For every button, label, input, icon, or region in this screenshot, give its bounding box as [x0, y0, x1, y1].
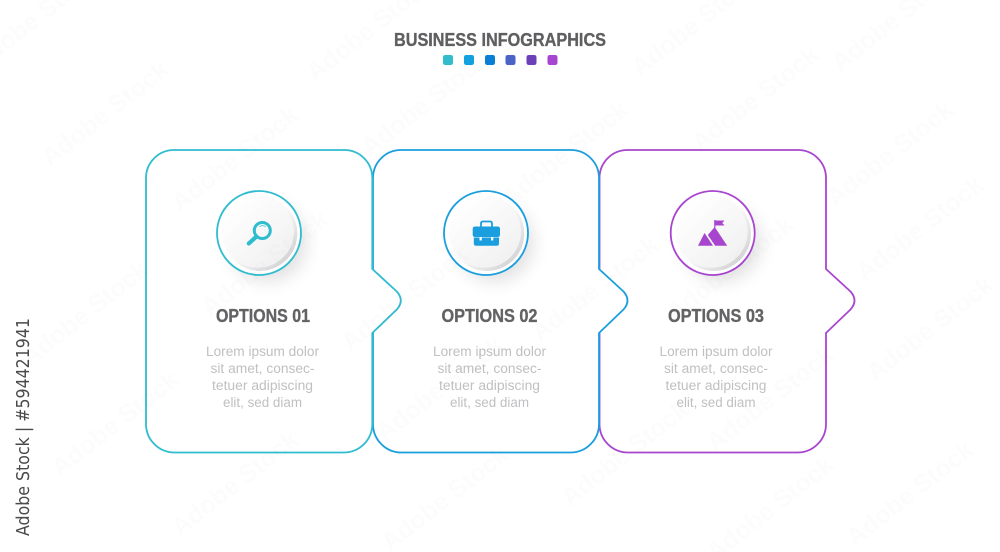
heading: options 03: OPTIONS 03	[668, 305, 764, 326]
panel: options 01	[146, 150, 401, 452]
heading: options 01: OPTIONS 01	[216, 305, 310, 326]
color dots row	[443, 55, 558, 65]
panel outline 03	[600, 150, 854, 452]
title: BUSINESS INFOGRAPHICS	[394, 29, 606, 50]
body text 02: tetuer adipiscing	[439, 378, 540, 393]
icon: mountain with flag	[698, 220, 727, 246]
body text 03: elit, sed diam	[676, 395, 756, 410]
icon: briefcase	[473, 222, 500, 246]
button 03	[671, 191, 760, 281]
body text 03: Lorem ipsum dolor	[660, 344, 773, 359]
panel outline 01	[146, 150, 401, 452]
watermark: stock id: Adobe Stock | #594421941	[14, 318, 34, 536]
panel outline 02	[373, 150, 628, 452]
body text 03: sit amet, consec-	[664, 361, 768, 376]
body text 01	[206, 344, 320, 410]
button 02	[444, 191, 533, 281]
body text 03: tetuer adipiscing	[666, 378, 766, 393]
body text 01: sit amet, consec-	[210, 361, 314, 376]
panel: options 03	[600, 150, 854, 452]
button 01	[217, 191, 306, 281]
body text 02: Lorem ipsum dolor	[433, 344, 547, 359]
panel: options 02	[373, 150, 628, 452]
body text 03	[660, 344, 773, 410]
body text 01: elit, sed diam	[223, 395, 302, 410]
body text 01: tetuer adipiscing	[212, 378, 313, 393]
body text 02: sit amet, consec-	[438, 361, 542, 376]
heading: options 02: OPTIONS 02	[442, 305, 538, 326]
body text 02: elit, sed diam	[450, 395, 529, 410]
body text 02	[433, 344, 547, 410]
icon: magnifying glass	[249, 222, 270, 244]
body text 01: Lorem ipsum dolor	[206, 344, 320, 359]
